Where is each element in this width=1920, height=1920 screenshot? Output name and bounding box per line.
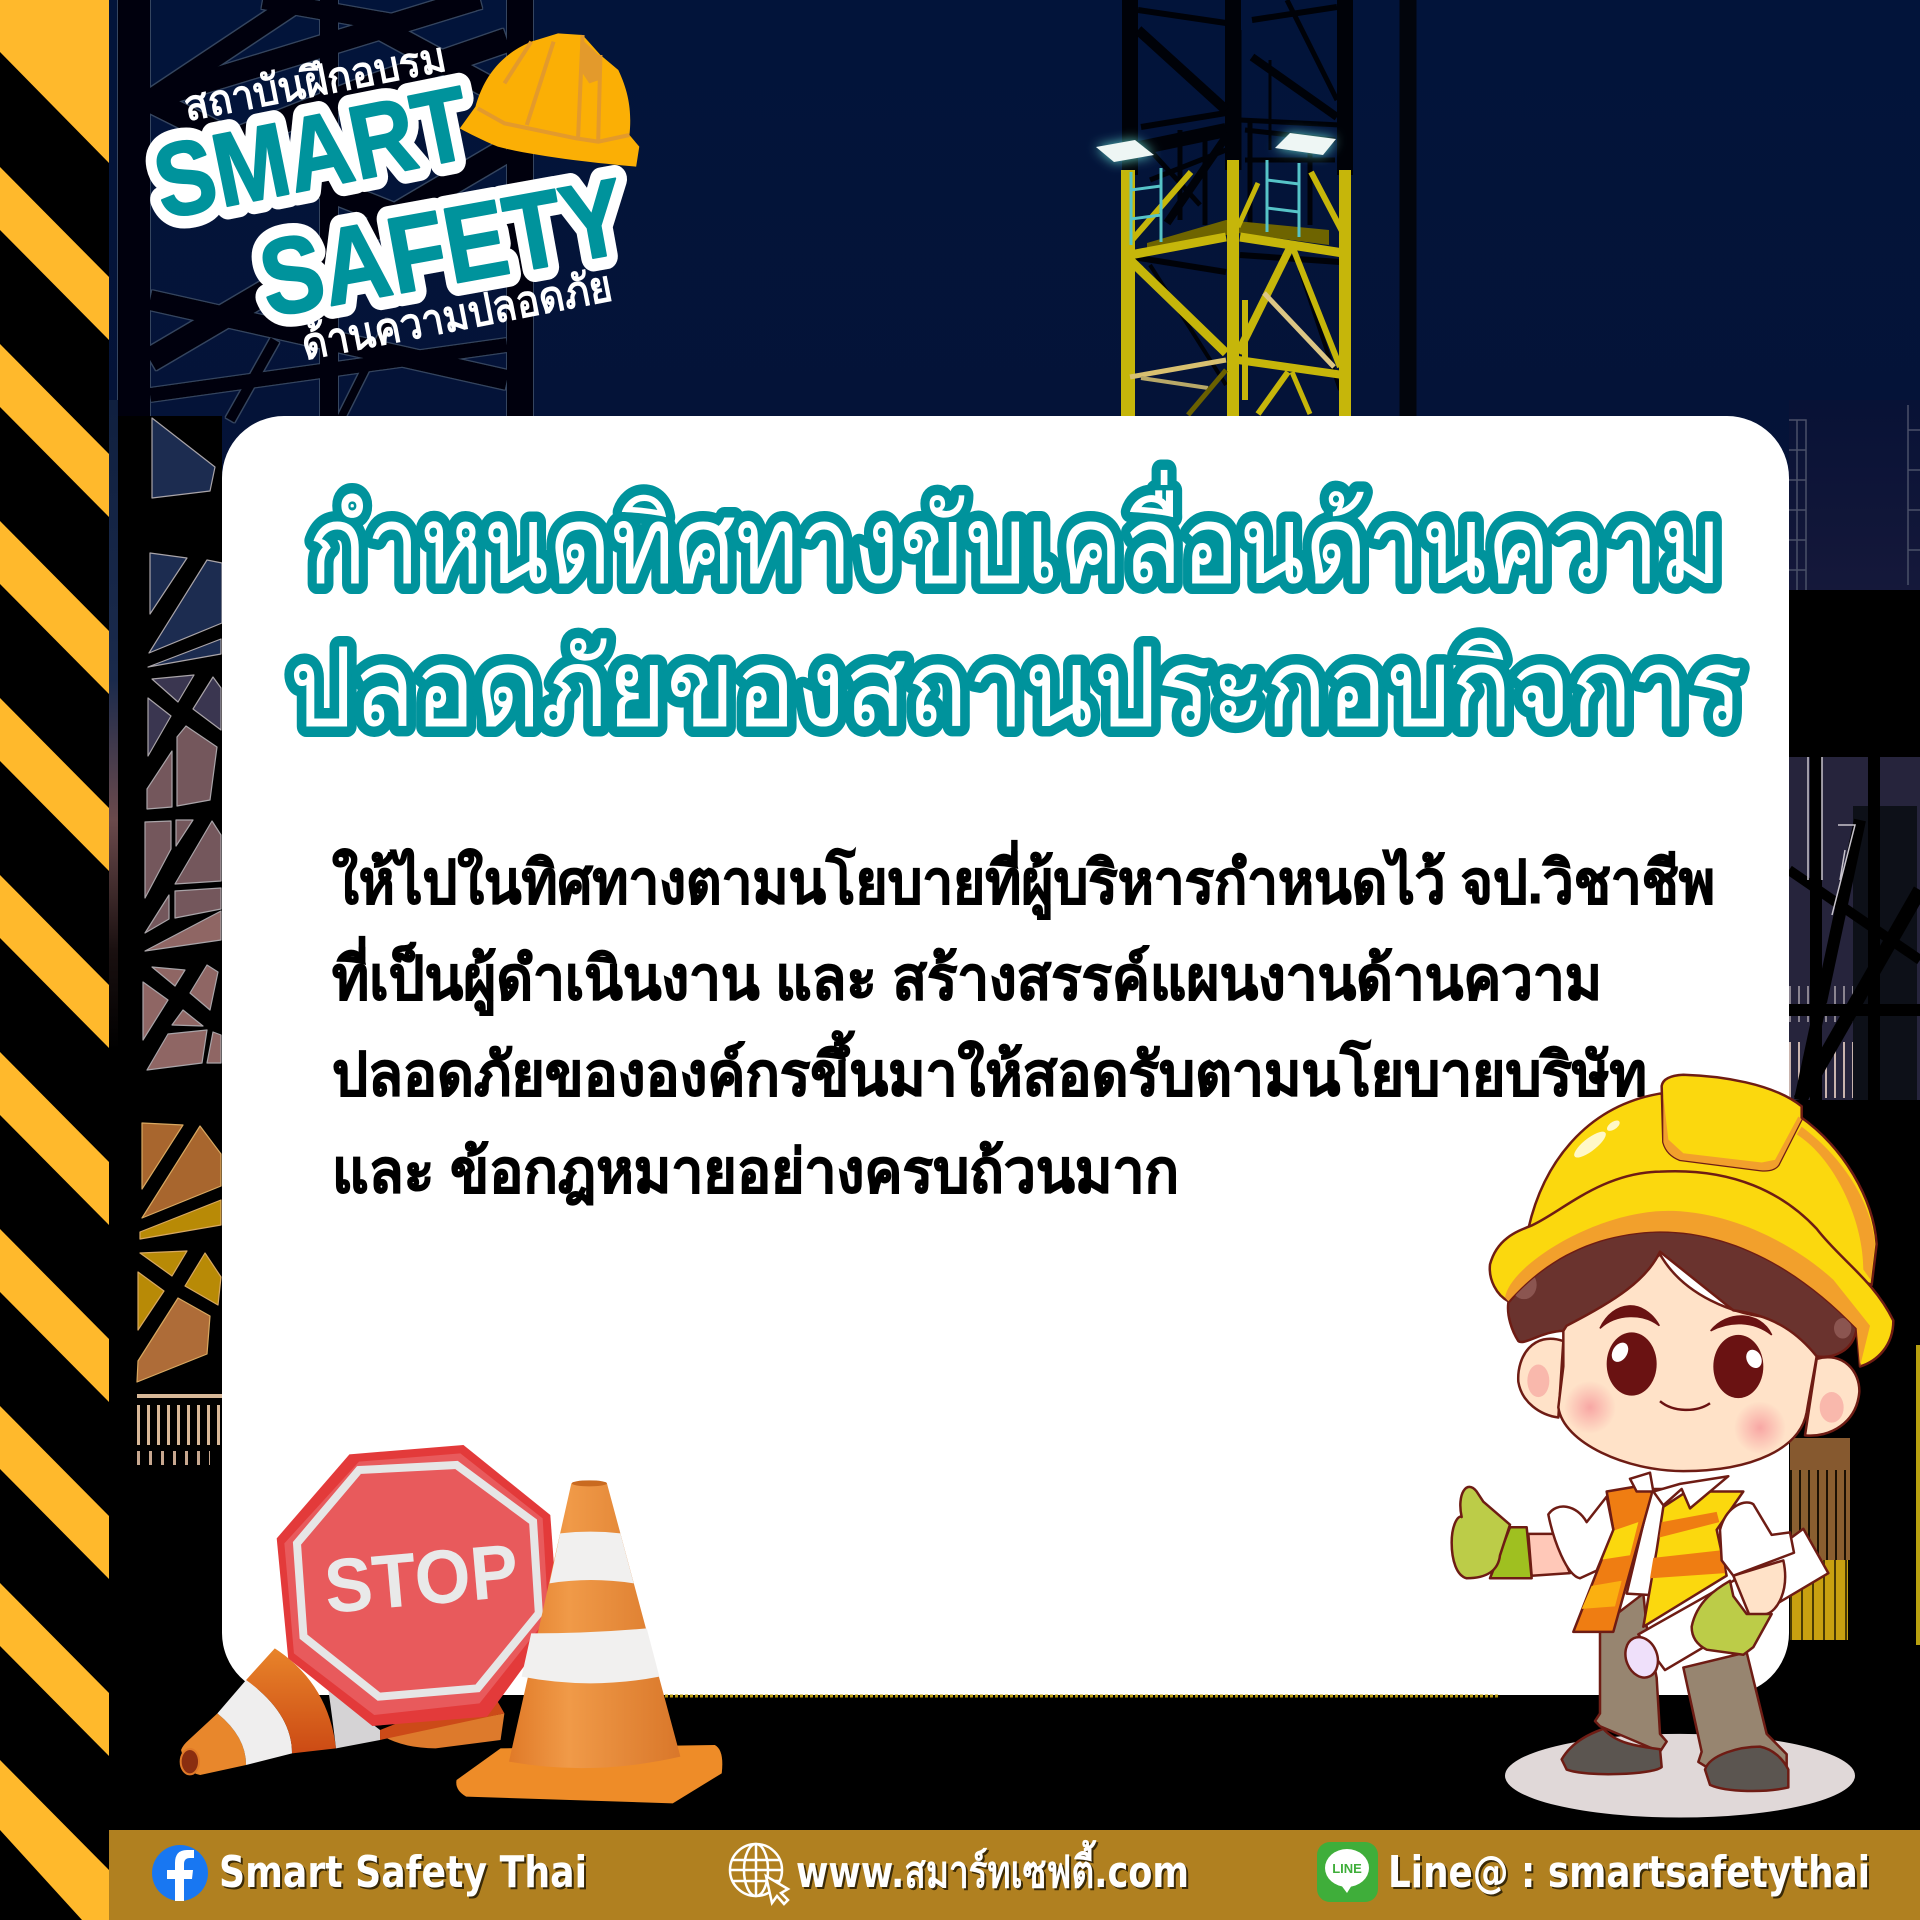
head: face: [1558, 1254, 1817, 1471]
footer text: website: www.สมาร์ทเซฟตี้.com: [798, 1841, 1191, 1900]
footer bar: Smart Safety Thai: [219, 1847, 587, 1898]
footer text: facebook: Smart Safety Thai: [221, 1849, 589, 1900]
icon: standing cone: [456, 1480, 722, 1803]
head: hair: [1508, 1231, 1857, 1357]
title: [289, 469, 1743, 750]
logo text: SMART: SMART: [145, 65, 479, 242]
logo: Smart Safety: [145, 33, 639, 370]
illustration: worker character: [1452, 1075, 1893, 1818]
head: eyes: [1607, 1332, 1763, 1398]
shoes: [1562, 1729, 1788, 1791]
body text: ให้ไปในทิศทางตามนโยบายที่ผู้บริหารกำหนดไว้ จป.วิชาชีพ: [332, 840, 1715, 920]
head: hat top plate: [1662, 1075, 1802, 1170]
icon: line: [1317, 1842, 1378, 1902]
shadow ellipse: [1505, 1734, 1855, 1818]
head: hat brim: [1490, 1171, 1893, 1367]
icon: stop sign: [277, 1445, 558, 1726]
head: hat back: [1528, 1094, 1877, 1285]
head: ears: [1518, 1339, 1859, 1436]
hazard stripes: [0, 0, 109, 1920]
trousers: [1595, 1594, 1787, 1770]
title: กำหนดทิศทางขับเคลื่อนด้านความ: [308, 469, 1722, 607]
logo: SAFETY outline: SAFETY: [250, 155, 634, 340]
body text: ปลอดภัยขององค์กรขึ้นมาให้สอดรับตามนโยบายบริษัท: [332, 1030, 1647, 1108]
icon: line: LINE: [1332, 1861, 1362, 1876]
footer bar: [109, 1830, 1920, 1920]
background: right side structures: [1789, 400, 1920, 1830]
background: left tower upper: [134, 0, 520, 420]
background: crane tower with lights: [1096, 0, 1408, 416]
icon: facebook: [152, 1845, 208, 1901]
logo text: top Thai: สถาบันฝึกอบรม: [180, 33, 450, 130]
body text: [332, 840, 1715, 1205]
panel: white card: [222, 416, 1789, 1695]
logo text: bottom Thai: ด้านความปลอดภัย: [298, 262, 616, 370]
icon: lying cone: [181, 1648, 504, 1775]
paper roll: [1622, 1529, 1828, 1684]
left arm and glove: [1452, 1487, 1613, 1578]
icon: globe: [730, 1844, 788, 1904]
background: night sky: [109, 0, 1920, 1000]
body text: และ ข้อกฎหมายอย่างครบถ้วนมาก: [332, 1138, 1179, 1205]
body text: ที่เป็นผู้ดำเนินงาน และ สร้างสรรค์แผนงานด้านความ: [332, 936, 1602, 1016]
logo text: SAFETY: SAFETY: [250, 155, 634, 340]
title: ปลอดภัยของสถานประกอบกิจการ: [289, 627, 1743, 750]
logo: SMART outline: SMART: [145, 65, 479, 242]
illustration: traffic cones and stop sign: [181, 1445, 722, 1803]
logo icon: helmet: [460, 33, 639, 167]
head: brows and mouth: [1600, 1306, 1772, 1410]
stop sign text: STOP: [321, 1528, 522, 1630]
head: blush: [1564, 1381, 1616, 1434]
background: left strip behind card: [109, 400, 222, 1830]
footer bar: www.สมาร์ทเซฟตี้.com: [796, 1839, 1189, 1898]
right arm and glove: [1692, 1503, 1794, 1655]
shirt and vest: [1573, 1473, 1743, 1632]
